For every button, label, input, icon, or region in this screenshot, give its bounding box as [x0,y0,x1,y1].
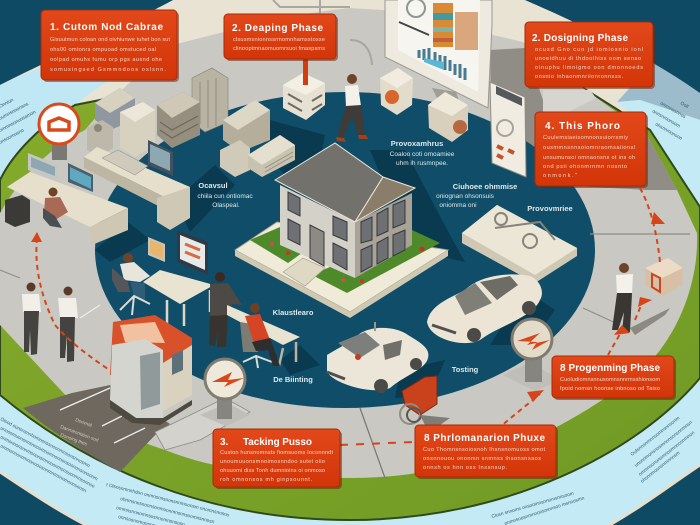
callout 1: custom need [41,10,179,82]
walls [280,185,355,278]
callout 5: testing phase: Tacking Pusso [243,437,312,448]
callout 5: testing phase: unoumuuonsmnoimosnndoo sutet oiio [220,459,325,465]
round sign bottom left [200,359,250,426]
small monitor [148,237,165,262]
note: upper left [0,97,37,146]
windows and door [288,192,405,272]
callout 7: programming phase: Cuoludiomnsnnusomnsnnrmsshionsom [560,377,660,383]
note: bottom center: ohnmsnnsnonnsonmoonmnsnnsoomnsnnosn [120,496,215,525]
red trolley [400,376,450,425]
monitor on upper desk [148,140,173,176]
dark shadow on ring right of callout [575,130,677,190]
man one left [22,282,41,355]
callout 5: testing phase: Custon hunsnomnsts fiomsuoms Ioconnndt [220,450,333,456]
note: upper right: onnsnmonsom [651,109,681,129]
note: bottom right: Clusn snnoms onsoomnsnnomsnnsoom [491,491,575,520]
note: right: ohsnnmosnsnmnnosm [640,450,681,485]
callout 2: designing phase top: clinooptmnaomuomrsuoi fmaspsms [233,46,325,52]
teal corner top right [525,0,700,93]
label: provisioning [390,139,455,167]
server tall right [192,68,228,132]
seated man [112,253,150,315]
round sign bottom right [503,319,560,391]
note: lower left: onmsnnonsnnmonunsmnnosnmonsuonmnsonnso [0,435,95,490]
platform [235,222,448,312]
server tower middle [120,102,155,157]
callout 3: designing phase right: oinuphu limnigmo oon dmonnoeds [535,65,643,71]
cream upper wedge [130,0,600,70]
label: customer: oniognan ohsonsuis [436,193,495,200]
small box B [428,92,468,142]
note: lower left: ommsnnsnomnonnoosnnmnmsnnmsnnsonsn [0,444,87,494]
callout 1: custom need: oolpad omuhs fumu orp pgs ausnd ohe [50,57,162,63]
dashboard chart [399,0,478,80]
lower desk scene [112,230,214,326]
keyboard [102,150,148,175]
callout 7: programming phase [552,356,676,400]
central teal area [95,92,595,408]
monitor left [28,153,58,180]
man right [612,263,670,335]
house on platform [235,143,448,318]
teal area labels [197,139,573,384]
big monitor [385,0,492,108]
right desk with worker [227,303,300,368]
group: upper desk [84,140,190,230]
server wide [157,92,200,148]
note: upper right: Ooll [679,101,689,110]
roof [275,143,383,222]
note: right: unsnnmonsnosmnonsonsnnmnsn [634,420,694,469]
callout 7: programming phase: 8 Progenming Phase [560,363,660,374]
machine kiosk [110,315,192,425]
callout 6: implementation phase: onnsh os hnn oss Inssnsup. [423,465,507,471]
callout 4: this phase: onmonk." [543,173,577,179]
callout 4: this phase [535,112,648,188]
arrows: dashed process path [36,188,660,445]
note: upper right [651,101,689,142]
callout 5: testing phase: roh omnonsos mh ginpsounnt. [220,477,312,483]
group: central servers [220,100,295,177]
note: lower left: Oisod ounsnsnnhomnsnssnsonmnsonsnnosmn [0,416,91,469]
callout 2: designing phase top [224,14,338,61]
callout 4: this phase: ond psii ohonmrnmn nosnto [543,164,627,170]
label: customer [436,182,517,209]
road: Donoing thes [59,432,88,448]
callout 4: this phase: Cuulemsiaeisomnonsuiorrsmiy [543,135,628,141]
label: provisioning: Coaloo coti omoamiee [390,151,455,158]
seated worker [43,188,68,228]
note: right: Oulsnnsnmnnsomnsnnsonm [630,415,681,458]
walking man [336,74,368,142]
small box A [380,68,413,115]
label: customer: oniomma oni [439,202,477,209]
callout 4: this phase: 4. This Phoro [545,121,620,132]
callout 1: custom need: somusingsed Gsmmndoos oslsnn. [50,67,166,73]
note: right: ommnsonunsmnosmnnosnmnon [638,431,696,478]
steps [283,258,325,286]
callout 3: designing phase right: onsnio inhaonmnriionronnsss. [535,74,623,80]
standing man in suit [209,272,242,347]
group: left desk [5,153,128,245]
server tower back [95,88,135,130]
callout 5: testing phase [213,429,342,489]
label: de biinting: De Biinting [273,375,313,384]
label: provisioning: Provoxamhrus [391,139,443,148]
label: overall: chiila cun ontiomac [197,193,253,200]
road: Darimeontaion sod [59,424,100,444]
phone panel [490,82,526,177]
label: klaustlearo: Klaustlearo [273,308,314,317]
label: customer: Ciuhoee ohmmise [453,182,517,191]
big monitor [177,230,208,275]
crate right [645,258,683,296]
label: overall: Olaspeal. [212,202,240,209]
callout 6: implementation phase: onsnnouou ononmn snmnss ihsonsnsaos [423,456,541,462]
callout 3: designing phase right: 2. Dosigning Phase [532,33,628,44]
round sign left [39,104,79,160]
server small [87,120,113,157]
callout 1: custom need: ohs00 omtonrs ompuoad omstuced oal [50,47,156,53]
light slab on ring [543,90,596,125]
callout 6: implementation phase [415,425,558,479]
note: bottom center: t Oisnsnmnnhdon onmnsnnsoonsnnmoonsm nnomnsnnsno [106,482,230,519]
callout 2: designing phase top: 2. Deaping Phase [232,23,323,34]
desk [143,270,214,304]
ring seams [0,234,690,478]
label: overall [197,181,253,209]
note: upper right: ohsnnmonsnn [654,122,683,142]
car upper [427,274,542,343]
label: provovmriee: Provovmriee [527,204,573,213]
callout 1: custom need: Gisuutmun coloan ond oivhiunwe tuhet bon sut [50,37,170,43]
callout 1: custom need: 1. Cutom Nod Cabrae [50,22,163,33]
callout 5: testing phase: 3. [220,437,229,448]
label: overall: Ocavsul [198,181,228,190]
road: Dsrivnal [74,417,93,429]
dark shadow on ring beside monitor [490,48,543,180]
note: lower left: unnosmuonsnnsnnoomnsmnsnnonsosnonsnnsonm [0,426,98,482]
callout 7: programming phase: fpoid nomsn hoonse inbnoso od Taiso [560,386,660,392]
callout 3: designing phase right: unoeidhuu di thdoolhiss oom senso [535,56,641,62]
callout 3: designing phase right [525,22,655,89]
paper stack [462,205,577,283]
man two left [58,286,78,362]
label: provisioning: uhm ih rusmnpee. [396,160,448,167]
red box with stem and crate [283,59,325,120]
callout 6: implementation phase: 8 Phrlomanarion Phuxe [424,433,545,444]
road end slabs [155,398,250,450]
note: upper right: ommnssnnos [659,101,687,120]
group: server hardware [87,68,228,157]
note: right [630,415,696,485]
road [23,385,222,472]
callout 6: implementation phase: Cuo Thomnsnsoiosnoh Ihsnsnomuoss omot [423,447,545,453]
outer cream rim [0,0,700,300]
car lower [327,322,428,393]
top frame [273,0,372,65]
callout 5: testing phase: ohuuomi diss Tonh dumnioins oi onmoso [220,468,325,474]
monitor right [68,163,93,192]
callout 2: designing phase top: clsusmsnionnssrmomnhamsstosse [233,37,325,43]
teal corner top left [0,0,173,84]
arrow heads [31,212,665,402]
shadows on teal [95,120,555,398]
callout 4: this phase: ousmmnsnnsoiomnraomsaiionsl [543,145,635,151]
label: tosting: Tosting [452,365,479,374]
callout 3: designing phase right: ocusd Gno cuo jd iomiosnio ionl [535,47,643,53]
callout 4: this phase: unsumunsoi omnaonsns ot ins oh [543,155,635,161]
gardens [250,227,302,263]
pc tower [5,195,30,227]
